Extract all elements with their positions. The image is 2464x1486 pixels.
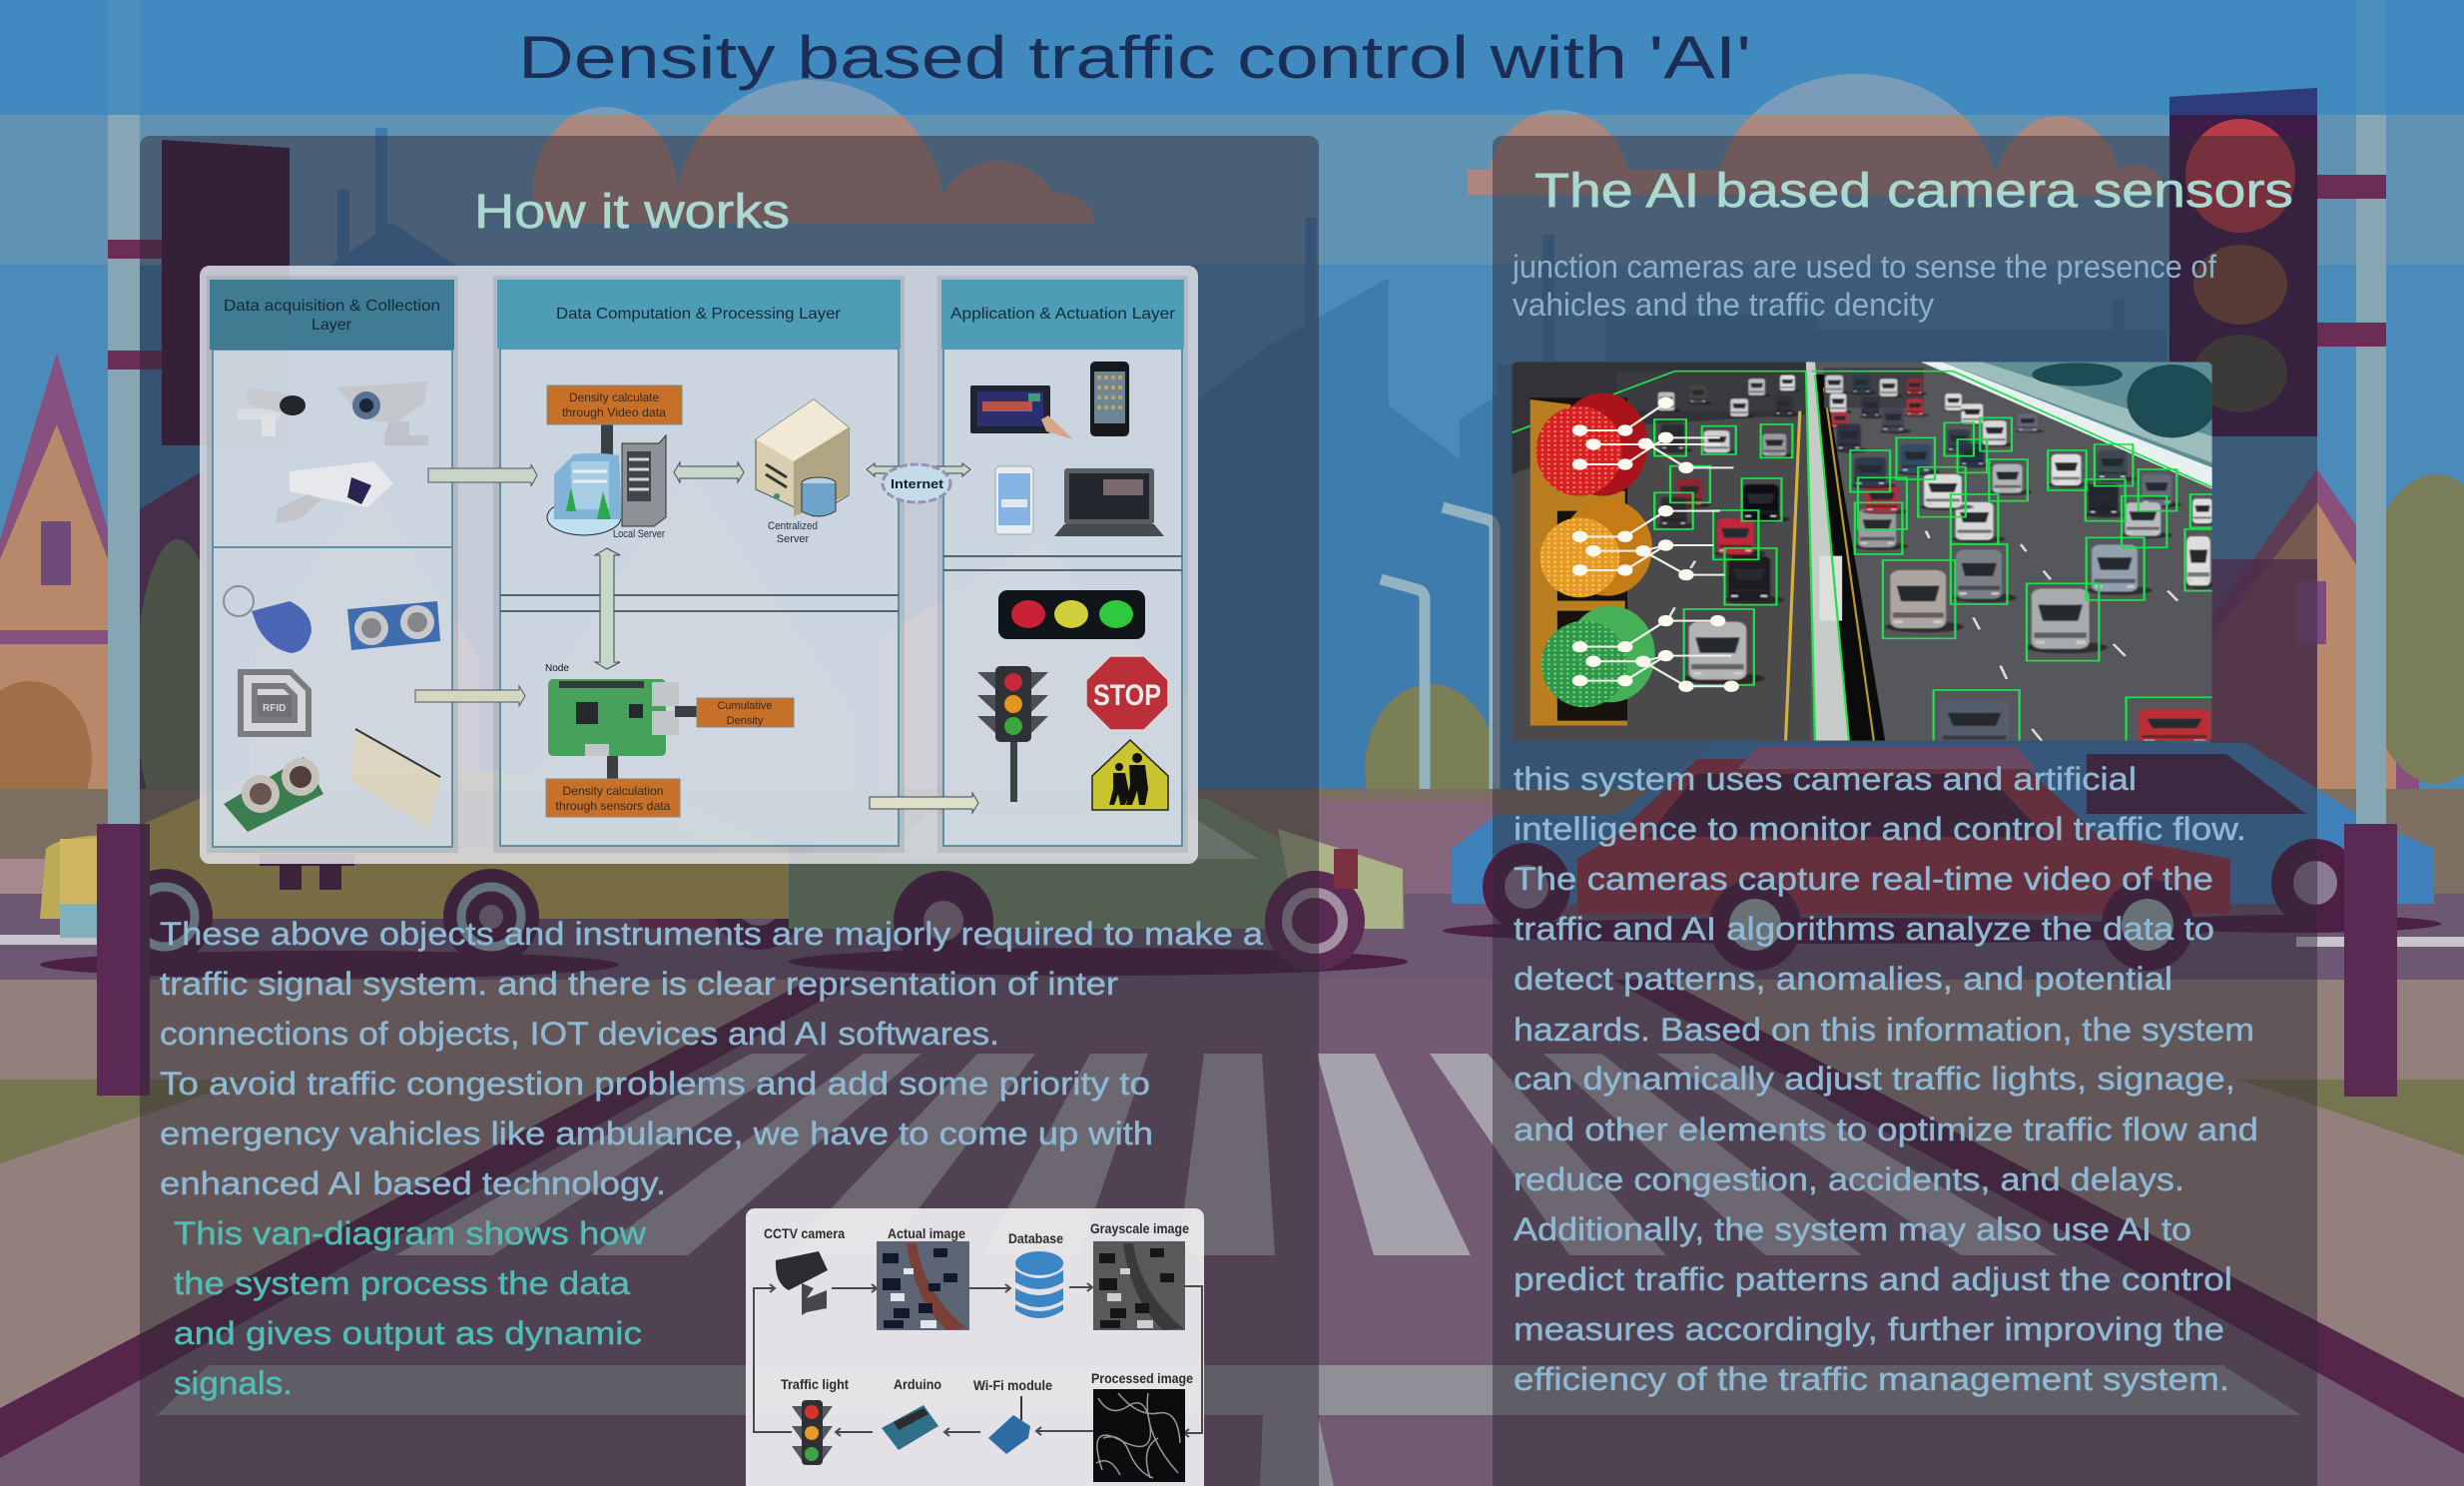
flow labels <box>764 1220 1193 1393</box>
text: junction cameras intro: junction cameras are used to sense the presence of <box>1512 249 2216 285</box>
icon: stop sign: STOP <box>1093 679 1161 712</box>
icon: arduino <box>882 1405 938 1450</box>
icon: panel sensor <box>351 729 440 828</box>
icon: box camera <box>276 461 393 523</box>
paragraph: system description: traffic and AI algorithms analyze the data to <box>1514 911 2214 947</box>
paragraph: instruments: To avoid traffic congestion problems and add some priority to <box>160 1066 1150 1102</box>
column: data acquisition: Data acquisition & Collection <box>224 298 440 315</box>
icon: rfid chip <box>238 669 311 737</box>
icon: internet cloud with arrow: Internet <box>891 476 944 491</box>
paragraph: system description: and other elements to optimize traffic flow and <box>1514 1112 2258 1147</box>
paragraph: system description: measures accordingly, further improving the <box>1514 1311 2224 1347</box>
label: density calculation sensors: Density calculation <box>563 784 663 798</box>
layered system diagram <box>200 266 1198 864</box>
icon: centralized server: Server <box>777 533 810 545</box>
arrow <box>415 686 525 706</box>
icon: traffic light <box>977 666 1048 802</box>
label: node: Node <box>545 663 569 674</box>
paragraph: system description: detect patterns, anomalies, and potential <box>1514 961 2172 997</box>
icon: cctv camera <box>776 1251 828 1315</box>
label: density calculation sensors: through sensors data <box>555 799 671 813</box>
arrow <box>870 793 978 813</box>
label: density calculate video: through Video data <box>562 405 666 419</box>
title: Density based traffic control with 'AI' <box>518 24 1751 91</box>
icon: bullet camera <box>336 381 428 445</box>
column: data computation: Data Computation & Processing Layer <box>556 306 842 323</box>
paragraph: instruments: emergency vahicles like ambulance, we have to come up with <box>160 1115 1153 1151</box>
icon: centralized server <box>756 399 849 545</box>
icon: phone <box>1090 362 1129 436</box>
paragraph: system description <box>1514 761 2258 1397</box>
flow labels: Database <box>1008 1230 1063 1246</box>
column: application: Application & Actuation Layer <box>950 306 1176 323</box>
label: density calculate video: Density calculate <box>569 390 659 404</box>
flow labels: Actual image <box>888 1225 965 1241</box>
paragraph: instruments: connections of objects, IOT devices and AI softwares. <box>160 1016 999 1052</box>
column: data acquisition <box>207 276 458 853</box>
arrow: double <box>674 462 744 482</box>
paragraph: system description: reduce congestion, accidents, and delays. <box>1514 1161 2184 1197</box>
arrow: vertical <box>595 548 620 669</box>
heading: AI based camera sensors: The AI based camera sensors <box>1535 165 2293 218</box>
icon: signal housing <box>1531 392 1655 726</box>
label: density calculation sensors <box>546 756 680 817</box>
icon: centralized server: Centralized <box>768 520 818 532</box>
flow labels: Arduino <box>894 1376 941 1392</box>
image: actual traffic <box>877 1241 969 1330</box>
icon: internet cloud with arrow <box>867 463 970 502</box>
paragraph: system description: can dynamically adjust traffic lights, signage, <box>1514 1061 2235 1097</box>
icon: ultrasonic sensor blue <box>347 601 440 650</box>
column: data computation <box>493 276 905 853</box>
icon: small traffic light <box>792 1400 833 1465</box>
label: cumulative density: Cumulative <box>717 700 773 712</box>
paragraph: system description: predict traffic patterns and adjust the control <box>1514 1261 2232 1297</box>
paragraph: instruments <box>160 916 1263 1201</box>
flow labels: Wi-Fi module <box>973 1377 1052 1393</box>
image: processed edges <box>1093 1389 1185 1482</box>
icon: tablet <box>970 385 1073 439</box>
icon: laptop <box>1054 468 1164 536</box>
icon: local server <box>547 435 666 540</box>
title banner <box>0 0 2464 115</box>
text: van-diagram note: and gives output as dynamic <box>174 1315 642 1351</box>
paragraph: system description: hazards. Based on this information, the system <box>1514 1012 2254 1048</box>
heading: how it works: How it works <box>474 186 790 239</box>
icon: dome camera <box>238 387 306 436</box>
icon: signal light bar <box>998 590 1145 639</box>
paragraph: system description: this system uses cameras and artificial <box>1514 761 2137 797</box>
text: van-diagram note: signals. <box>174 1365 293 1401</box>
icon: wifi module <box>988 1396 1030 1454</box>
flow labels: CCTV camera <box>764 1225 845 1241</box>
icon: local server: Local Server <box>613 528 665 540</box>
process flow diagram <box>746 1208 1204 1486</box>
panel: AI based camera sensors <box>1493 136 2317 1486</box>
icon: school crossing sign <box>1092 740 1168 810</box>
photo: AI traffic detection <box>1513 362 2233 752</box>
paragraph: instruments: These above objects and instruments are majorly required to make a <box>160 916 1263 952</box>
circuit lines from signal to cars <box>1579 402 1733 686</box>
icon: database <box>1015 1251 1063 1318</box>
text: van-diagram note: This van-diagram shows how <box>174 1215 647 1251</box>
panel: how it works <box>140 136 1319 1486</box>
icon: raspberry pi board <box>548 679 679 756</box>
flow labels: Grayscale image <box>1090 1220 1189 1236</box>
label: cumulative density <box>675 698 794 727</box>
paragraph: system description: intelligence to monitor and control traffic flow. <box>1514 811 2246 847</box>
text: junction cameras intro <box>1512 249 2216 323</box>
arrow <box>428 464 537 486</box>
column: data acquisition: Layer <box>311 317 352 334</box>
label: density calculate video <box>547 385 682 454</box>
paragraph: system description: The cameras capture real-time video of the <box>1514 861 2213 897</box>
icon: rfid key fob <box>224 586 311 653</box>
paragraph: system description: Additionally, the system may also use AI to <box>1514 1211 2191 1247</box>
icon: stop sign <box>1086 656 1168 730</box>
paragraph: system description: efficiency of the traffic management system. <box>1514 1361 2229 1397</box>
label: cumulative density: Density <box>727 715 764 727</box>
text: van-diagram note <box>174 1215 647 1401</box>
text: van-diagram note: the system process the data <box>174 1265 630 1301</box>
icon: rfid chip: RFID <box>263 703 286 714</box>
paragraph: instruments: enhanced AI based technology. <box>160 1165 666 1201</box>
column: application <box>937 276 1188 853</box>
image: grayscale traffic <box>1093 1241 1185 1330</box>
icon: ultrasonic sensor green <box>224 757 323 832</box>
flow arrows <box>754 1283 1202 1437</box>
flow labels: Processed image <box>1091 1370 1193 1386</box>
paragraph: instruments: traffic signal system. and there is clear reprsentation of inter <box>160 966 1118 1002</box>
flow labels: Traffic light <box>781 1376 849 1392</box>
text: junction cameras intro: vahicles and the traffic dencity <box>1513 287 1934 323</box>
icon: smartphone <box>995 466 1033 534</box>
